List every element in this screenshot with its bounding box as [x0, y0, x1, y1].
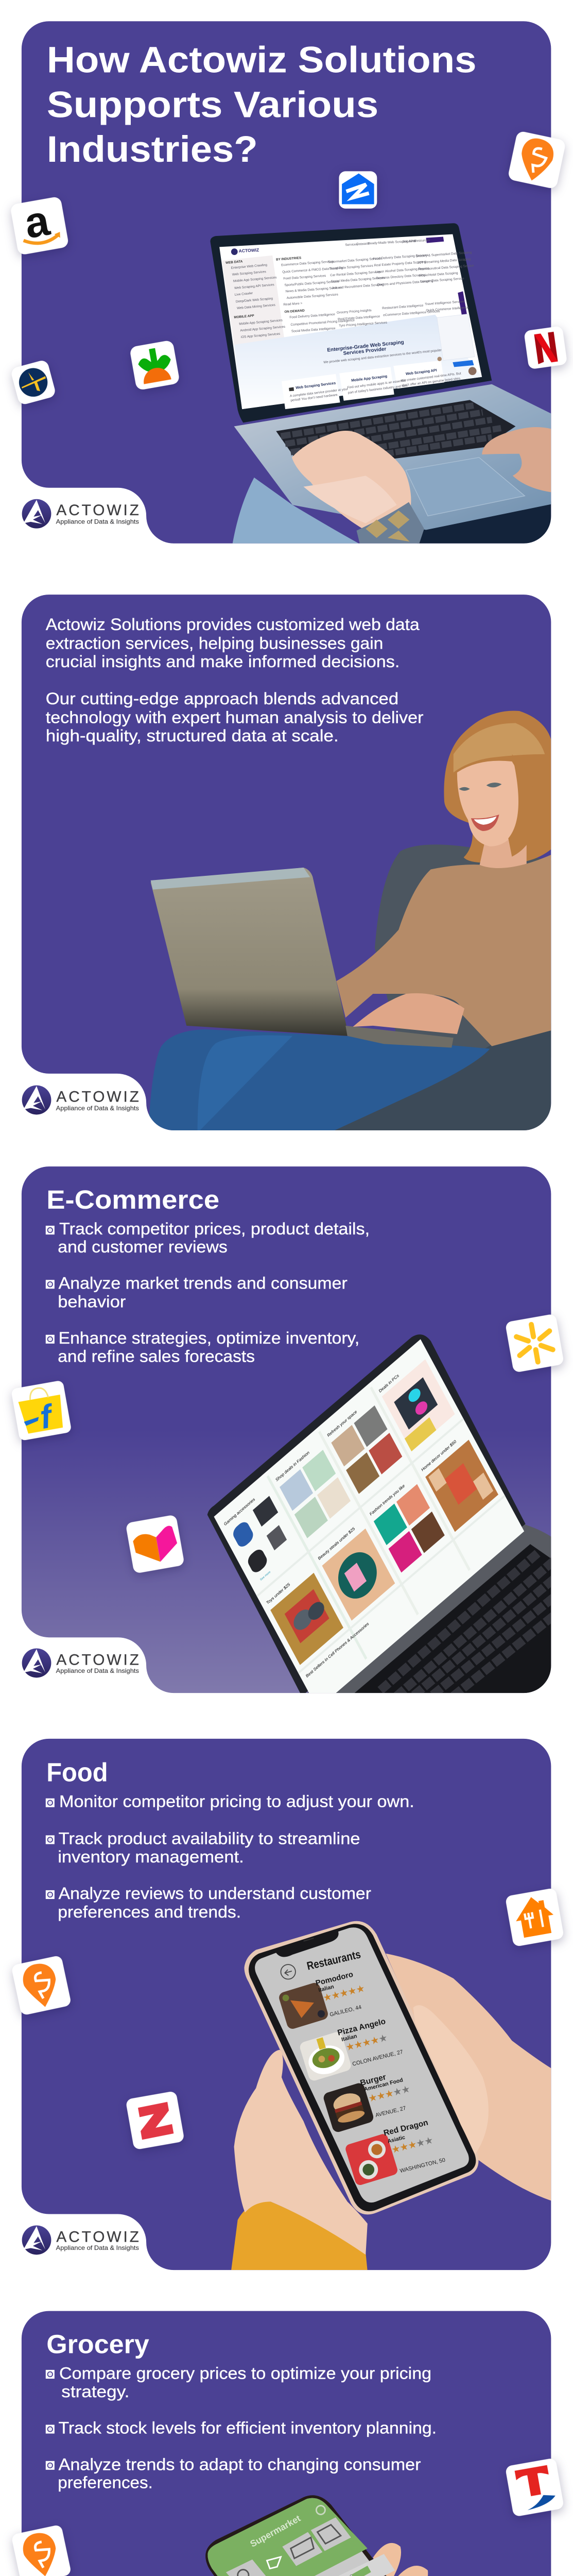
laptop screen: Datasets [356, 242, 370, 246]
bullet list: and customer reviews [58, 1238, 228, 1256]
restaurant 1 [277, 1971, 366, 2030]
phone body [244, 1921, 479, 2214]
intro text: Our cutting-edge approach blends advanced [46, 689, 398, 708]
logo: ACTOWIZ [56, 1089, 139, 1106]
icon: lazada [126, 1514, 185, 1574]
laptop screen: don't offer an API on genuine listed sites. [402, 377, 461, 387]
laptop screen [214, 1339, 524, 1709]
icon: tesco [505, 2458, 564, 2517]
product row stripes [271, 2554, 475, 2576]
hand [353, 993, 464, 1034]
laptop screen: Android App Scraping Services [240, 325, 285, 332]
tile: fashion trends [369, 1476, 445, 1572]
bullet list [46, 2364, 437, 2492]
tile: home decor: Home decor under $50 [421, 1439, 457, 1472]
phone screen [207, 2498, 478, 2576]
laptop screen: Mobile App Scraping Services [239, 318, 283, 326]
panel: food [11, 1739, 564, 2271]
screen title: Restaurants [306, 1947, 362, 1973]
laptop screen: Enterprise-Grade Web Scraping [327, 340, 404, 353]
tile: toys under $25: Toys under $25 [266, 1582, 291, 1605]
logo: ACTOWIZ [56, 502, 139, 519]
bullet list: Track stock levels for efficient inventory planning. [59, 2419, 437, 2437]
highlight hair [454, 723, 545, 772]
laptop screen: eCommerce Data Intelligence Services [383, 310, 440, 317]
laptop screen: Job and Recruitment Data Scraping [332, 283, 384, 290]
bullet list: Monitor competitor pricing to adjust your own. [59, 1792, 414, 1811]
icon: swiggy [11, 1955, 72, 2016]
laptop screen: Grocery Pricing Insights [337, 309, 372, 315]
phone notch speaker [304, 1938, 314, 1941]
laptop lid [151, 868, 348, 1036]
bullet list: Compare grocery prices to optimize your pricing [59, 2364, 431, 2383]
laptop screen: Food Delivery Data Intelligence [289, 313, 335, 319]
title: Industries? [47, 129, 258, 170]
bullet list: strategy. [61, 2382, 129, 2401]
laptop screen: Services Provider [343, 346, 387, 357]
chair back [375, 844, 551, 1058]
tile: home decor [421, 1431, 498, 1532]
phone screen [255, 1927, 469, 2202]
icon: flipkart: f [37, 1397, 57, 1436]
laptop screen: A complete data service provider at your [290, 387, 349, 398]
fingers behind phone [373, 2543, 455, 2576]
laptop screen: OTT Streaming Media Data Scraping [416, 258, 471, 265]
restaurant 3 [322, 2073, 411, 2133]
restaurant 4: Red Dragon [383, 2118, 429, 2138]
laptop screen: Web Scraping API Services [234, 283, 274, 290]
laptop screen: Web Scraping API [406, 368, 437, 376]
laptop screen [219, 234, 482, 409]
icon: flipkart [11, 1380, 72, 1441]
laptop screen: BY INDUSTRIES [276, 256, 301, 262]
laptop screen: Food Delivery Data Scraping Services [373, 253, 428, 261]
laptop screen: News & Media Data Scraping Services [285, 286, 342, 294]
photo: woman with laptop [148, 711, 551, 1133]
restaurant 4 [344, 2118, 446, 2187]
laptop screen: part of today's business industry and how [348, 384, 408, 395]
laptop screen: Deep/Dark Web Scraping [236, 297, 273, 303]
laptop base edge [345, 1026, 454, 1047]
icon: swiggy [11, 2524, 72, 2576]
laptop screen: Web Data Mining Services [237, 303, 275, 310]
laptop screen: Solutions [403, 240, 416, 244]
trackpad [406, 457, 525, 516]
title: Supports Various [47, 84, 378, 125]
laptop screen: Supermarket Data Scraping Services [328, 257, 382, 264]
tile: shop deals in fashion [275, 1441, 351, 1538]
restaurant 2 [299, 2017, 404, 2082]
laptop screen: ACTOWIZ [238, 247, 259, 253]
bullet list: behavior [58, 1293, 126, 1311]
tile: refresh your space [326, 1397, 402, 1494]
panel: hero [9, 21, 567, 545]
laptop screen: Enterprise Web Crawling [231, 263, 268, 270]
eyes [459, 783, 501, 791]
bullet list: Track competitor prices, product details, [59, 1219, 370, 1238]
restaurant 3: ★★★★★ [368, 2084, 411, 2105]
restaurant 2: COLON AVENUE, 27 [352, 2049, 404, 2067]
bullet list [46, 1792, 414, 1921]
back hand [386, 1954, 554, 2201]
dark jeans [417, 501, 551, 545]
e-commerce background [22, 1166, 551, 1693]
restaurant 2: Pizza Angelo [337, 2017, 387, 2038]
logo: Appliance of Data & Insights [56, 518, 139, 525]
intro background [22, 595, 551, 1130]
laptop screen: Resources [414, 239, 430, 243]
bullet list: Enhance strategies, optimize inventory, [59, 1329, 359, 1347]
laptop screen: Ecommerce Data Scraping Services [281, 260, 334, 267]
laptop screen: Live Crawler [235, 292, 253, 297]
tile: beauty steals: Beauty steals under $25 [318, 1526, 356, 1561]
title: How Actowiz Solutions [47, 40, 476, 81]
logo: ACTOWIZ [56, 1651, 139, 1668]
laptop screen: Real Estate Data Intelligence [338, 315, 380, 321]
tile: best sellers: Best Sellers in Cell Phones & Accessories [305, 1621, 370, 1679]
bullet list: preferences. [58, 2473, 153, 2492]
laptop screen: Liquor Alcohol Data Scraping Service [375, 267, 429, 274]
hero background [22, 21, 551, 544]
laptop screen: Doctors and Physicians Data Scraping [377, 279, 433, 287]
intro text: Actowiz Solutions provides customized web data [46, 615, 420, 634]
laptop base [304, 1524, 554, 1696]
laptop screen: MOBILE APP [234, 314, 255, 319]
restaurant 3: AVENUE, 27 [375, 2105, 407, 2119]
logo [22, 1086, 139, 1114]
heading: Grocery [46, 2329, 149, 2359]
title [47, 40, 476, 170]
laptop screen: period! You don't need hardware. [290, 393, 339, 402]
knee shading [198, 1035, 292, 1133]
laptop screen: Grocery & Supermarket Data Scraping [415, 251, 472, 258]
tile: fashion trends: Fashion trends you like [369, 1483, 406, 1517]
icon: instacart [129, 340, 180, 391]
bullet list [46, 1219, 370, 1365]
laptop screen: Food Data Scraping Services [283, 274, 326, 281]
restaurant 4: Asiatic [387, 2134, 406, 2145]
laptop screen: Services [345, 243, 358, 247]
heading: Food [46, 1757, 108, 1787]
hair [444, 711, 551, 863]
logo: Appliance of Data & Insights [56, 2244, 139, 2251]
bullet list: Analyze trends to adapt to changing consumer [59, 2455, 421, 2474]
laptop screen: Quick Commerce & FMCG Data Scraping [282, 266, 343, 274]
tile: deals in PCs: Deals in PCs [378, 1373, 400, 1394]
restaurant 3: Burger [359, 2073, 387, 2088]
jeans [148, 1029, 490, 1133]
bullet list: Track product availability to streamline [59, 1829, 360, 1848]
tile: deals in PCs [378, 1352, 455, 1451]
lid highlight [151, 868, 310, 890]
sleeve [231, 2201, 368, 2271]
icon: expedia [10, 359, 57, 405]
laptop screen: Tyre Pricing Intelligence Services [339, 321, 387, 328]
laptop screen: Web Scraping Services [232, 270, 266, 277]
product rows [256, 2566, 474, 2576]
tile: gaming accessories: See more [259, 1570, 271, 1582]
bullet list: inventory management. [58, 1848, 244, 1866]
phone bezel [249, 1924, 476, 2211]
face [457, 761, 525, 846]
food background [22, 1739, 551, 2270]
logo [22, 2226, 139, 2255]
wrist bracelet [357, 502, 424, 545]
logo: Appliance of Data & Insights [56, 1105, 139, 1112]
panel: introduction [22, 595, 551, 1133]
laptop screen: Restaurant Data Intelligence [382, 304, 424, 310]
front hand [234, 2050, 368, 2255]
restaurant 4: ★★★★★ [390, 2135, 434, 2156]
icon: takeaway [505, 1888, 564, 1947]
laptop lid bezel [207, 1334, 526, 1696]
laptop screen: Movie/Hotel Data Scraping [419, 272, 458, 278]
icon: zomato [126, 2091, 185, 2150]
laptop screen: We provide web scraping and data extraction services to the world's most popular [323, 348, 442, 364]
keyboard [276, 400, 516, 459]
logo: Appliance of Data & Insights [56, 1667, 139, 1674]
restaurant 3: American Food [363, 2077, 404, 2093]
laptop front hand [292, 431, 411, 531]
phone in hands [231, 1921, 554, 2271]
light flare on hand [304, 476, 397, 523]
fingers [413, 2005, 489, 2154]
laptop screen: Car Rental Data Scraping Services [330, 270, 381, 277]
tile: beauty steals [318, 1520, 395, 1621]
keyboard [351, 1544, 554, 1696]
restaurant 4: WASHINGTON, 50 [400, 2157, 446, 2174]
laptop screen: Web Scraping Services [296, 381, 336, 390]
logo: ACTOWIZ [56, 2228, 139, 2245]
teeth [474, 817, 497, 825]
chair arm [329, 1023, 551, 1133]
tile: shop deals in fashion: Shop deals in Fashion [275, 1450, 310, 1482]
screen title: Supermarket [248, 2513, 302, 2549]
phone in hand [205, 2495, 554, 2576]
laptop screen: Mobile App Scraping Services [233, 276, 277, 283]
laptop screen: Business Directory Data Scraping [376, 273, 426, 280]
tile: refresh your space: Refresh your space [326, 1409, 358, 1438]
sweater [336, 855, 551, 1046]
mouth [471, 815, 499, 831]
green header [207, 2498, 368, 2576]
laptop screen: WEB DATA [225, 260, 243, 265]
jeans [233, 478, 362, 545]
icon: amazon [9, 193, 69, 256]
phone body [205, 2495, 485, 2576]
restaurant 2: ★★★★★ [344, 2032, 388, 2054]
laptop screen: Automobile Data Scraping Services [287, 293, 338, 300]
laptop screen: Pharmaceutical Data Scraping Service [418, 264, 474, 272]
laptop screen: Ready-Made Web Scraping APIs [368, 240, 416, 245]
laptop screen: Travel Data Scraping Services [329, 264, 373, 270]
laptop screen: Read More > [283, 301, 303, 307]
laptop screen: Real Estate Property Data Scraping [374, 260, 426, 267]
laptop screen: Lawyer Data Scraping Service [420, 277, 464, 283]
restaurant 2: Italian [341, 2033, 358, 2043]
panel: e-commerce [11, 1166, 564, 1709]
restaurant 1: ★★★★★ [322, 1983, 366, 2004]
bullet list: Analyze reviews to understand customer [59, 1884, 371, 1903]
restaurant 1: Italian [318, 1984, 335, 1993]
laptop screen: Competitive Promotional Pricing Intelligence [290, 318, 355, 327]
laptop base [234, 384, 551, 530]
laptop screen: We create customized real-time APIs. But [401, 372, 461, 383]
bullet list: Analyze market trends and consumer [59, 1274, 348, 1292]
tabs [226, 2505, 351, 2576]
laptop screen: Find out why mobile apps is an essential [347, 379, 406, 389]
intro text: crucial insights and make informed decisions. [46, 652, 400, 671]
back button [281, 1964, 296, 1979]
icon: walmart [505, 1314, 564, 1373]
intro text: extraction services, helping businesses gain [46, 634, 383, 652]
panel: grocery [11, 2311, 564, 2576]
side hair [508, 754, 537, 857]
tile: gaming accessories [223, 1487, 299, 1585]
laptop screen: Sports/Public Data Scraping Services [284, 280, 339, 287]
laptop screen: iOS App Scraping Services [241, 332, 280, 339]
laptop and hands photo [210, 223, 551, 545]
laptop bezel [210, 223, 492, 422]
bullet list: and refine sales forecasts [58, 1347, 255, 1365]
logo [22, 1649, 139, 1677]
laptop screen: Mobile App Scraping [351, 374, 388, 383]
tile: gaming accessories: Gaming accessories [223, 1497, 256, 1527]
laptop screen: ON DEMAND [284, 309, 305, 314]
intro text: high-quality, structured data at scale. [46, 726, 339, 745]
right hand [482, 427, 551, 492]
tilted laptop [207, 1334, 554, 1709]
logo [22, 499, 139, 529]
icon: netflix [524, 326, 567, 369]
grocery background [22, 2311, 551, 2576]
icon: amazon: a [21, 195, 54, 247]
laptop screen: Quick Commerce Intelligence [426, 306, 469, 312]
restaurant 1: Pomodoro [315, 1971, 354, 1988]
laptop screen: Travel Intelligence Services [425, 300, 465, 306]
intro text: technology with expert human analysis to deliver [46, 708, 424, 726]
bullet list: preferences and trends. [58, 1903, 241, 1921]
neck [479, 835, 527, 871]
intro text [46, 615, 424, 745]
laptop screen: Social Media Data Intelligence [291, 327, 336, 333]
icon: swiggy [507, 130, 566, 190]
restaurant 1: GALILEO, 44 [329, 2004, 362, 2018]
tile: toys under $25 [266, 1564, 343, 1665]
heading: E-Commerce [46, 1185, 219, 1214]
icon: zillow [339, 171, 377, 209]
laptop screen: Social Media Data Scraping Services [331, 276, 385, 283]
